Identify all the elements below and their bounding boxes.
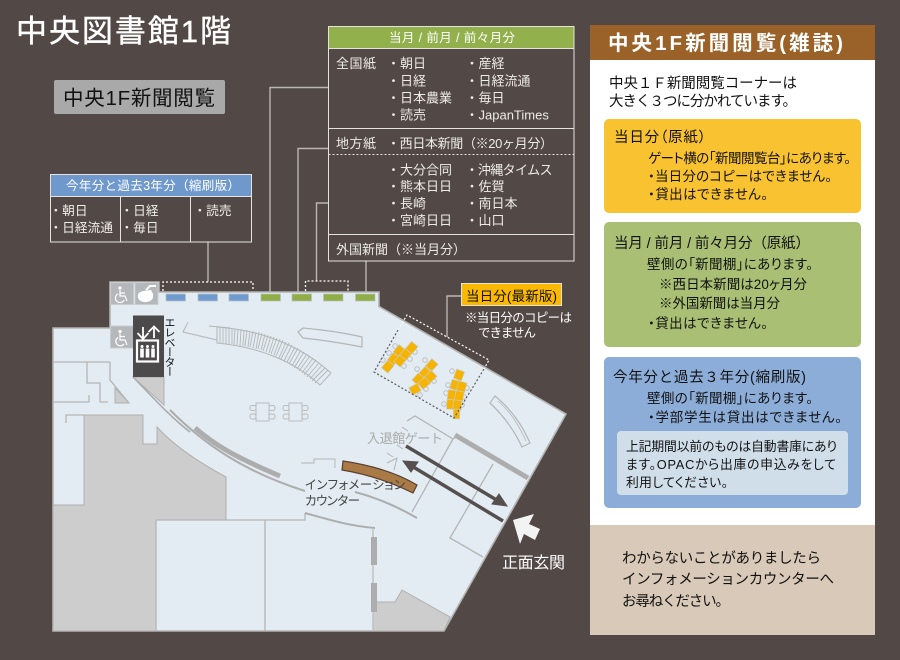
panel: 当月/前月/前々月分: 全国紙 [336,56,376,71]
dotted shelf brackets [163,281,348,291]
footer: help note: わからないことがありましたら [622,550,821,567]
newspaper reading tables: chairs [381,344,469,407]
intro text: 大きく３つに分かれています。 [609,93,797,110]
panel: 当月/前月/前々月分: 外国新聞（※当月分） [336,242,466,257]
leader lines [208,88,461,337]
note: 自動書庫 [617,431,848,495]
panel: 当月/前月/前々月分: ・大分合同 [387,162,452,178]
arrow: main entrance [513,514,540,544]
footer: help note: お尋ねください。 [622,593,730,610]
icon: elevator [133,316,164,377]
panel: 当月/前月/前々月分: 当月 / 前月 / 前々月分 [389,30,515,45]
panel: 当月/前月/前々月分: ・日本農業 [387,90,452,106]
callout: 当日分(最新版): 当日分(最新版) [466,289,557,304]
card: 当日分(原紙): ・当日分のコピーはできません。 [648,169,832,184]
panel: 当月/前月/前々月分: ・毎日 [466,90,505,106]
newspaper reading tables: yellow [381,341,467,419]
card: 当日分(原紙) [604,119,861,213]
label: 正面玄関: 正面玄関 [502,554,565,572]
panel: 今年分と過去3年分: ・読売 [194,203,232,218]
note: 自動書庫: 上記期間以前のものは自動書庫にあり [626,439,837,454]
panel: 今年分と過去3年分: ・毎日 [120,220,159,235]
info counter [342,461,417,493]
panel: 今年分と過去3年分: 今年分と過去3年分（縮刷版） [66,178,240,193]
panel: 今年分と過去3年分: ・日経 [120,204,159,218]
panel: 当月/前月/前々月分: ・宮崎日日 [387,213,452,228]
panel: 今年分と過去3年分: ・朝日 [50,204,88,218]
heading: 中央1F新聞閲覧(雑誌) [590,25,875,60]
panel: 当月/前月/前々月分: ・西日本新聞（※20ヶ月分） [387,136,553,151]
card: 今年分と過去3年分(縮刷版): 今年分と過去３年分(縮刷版) [613,369,806,386]
panel: 当月/前月/前々月分: ・日経流通 [466,74,531,88]
note: コピー不可: できません [478,326,536,340]
icon: wheelchair restroom left [110,282,134,304]
panel: 当月/前月/前々月分: ・日経 [387,74,426,88]
panel: 当月/前月/前々月分: ・産経 [466,56,505,71]
floor plan [53,281,566,631]
shelves: 縮刷版 blue [166,294,248,301]
panel: 当月/前月/前々月分: ・朝日 [387,56,426,71]
card: 当日分(原紙): ・貸出はできません。 [648,187,768,202]
panel: 当月/前月/前々月分: 地方紙 [336,136,376,151]
panel: 当月/前月/前々月分: ・沖縄タイムス [466,162,552,178]
panel: 今年分と過去3年分 [50,174,252,242]
label: インフォメーションカウンター: カウンター [305,494,360,508]
label: エレベーター: エレベーター [163,317,176,376]
panel: 当月/前月/前々月分: ・佐賀 [466,179,505,194]
panel: 当月/前月/前々月分: ・熊本日日 [387,179,452,194]
shelves: 原紙 green [261,294,375,301]
floor outline [53,282,566,631]
note: 自動書庫: ます。OPACから出庫の申込みをして [626,457,836,472]
note: コピー不可: ※当日分のコピーは [465,311,572,325]
label: インフォメーションカウンター: インフォメーション [305,478,405,492]
interior walls [53,362,493,631]
curved wall with counter [170,410,528,631]
panel: right information column [590,25,875,635]
panel: 当月/前月/前々月分: ・南日本 [466,196,518,211]
footer: help note [590,525,875,635]
footer: help note: インフォメーションカウンターへ [622,571,834,588]
card: 今年分と過去3年分(縮刷版): ・学部学生は貸出はできません。 [648,410,842,425]
section label: 中央1F新聞閲覧 [54,80,225,114]
dotted area: 当日分 tables [374,315,489,418]
card: 当月/前月/前々月分(原紙): ※外国新聞は当月分 [659,296,780,311]
card: 当日分(原紙): ゲート横の「新聞閲覧台」にあります。 [648,151,851,166]
card: 当月/前月/前々月分(原紙) [604,222,861,347]
card: 当日分(原紙): 当日分（原紙） [614,129,706,146]
card: 当月/前月/前々月分(原紙): 壁側の「新聞棚」にあります。 [647,257,813,272]
callout: 当日分(最新版) [462,284,562,306]
panel: 当月/前月/前々月分: ・長崎 [387,196,426,211]
icon: washing hands [135,282,158,304]
note: 自動書庫: 利用してください。 [626,475,728,490]
icon: wheelchair restroom lower [110,326,134,348]
label: インフォメーションカウンター [305,478,405,508]
panel: 当月/前月/前々月分 [328,26,574,261]
curved hatched stairs [183,322,530,447]
panel: 当月/前月/前々月分: ・山口 [466,213,505,228]
gray non-public areas [53,377,450,631]
intro text: 中央１Ｆ新聞閲覧コーナーは [609,75,797,92]
card: 今年分と過去3年分(縮刷版): 壁側の「新聞棚」にあります。 [647,391,813,406]
title: 中央図書館1階 [16,14,231,49]
card: 今年分と過去3年分(縮刷版) [604,357,861,508]
label: 入退館ゲート: 入退館ゲート [367,431,443,446]
heading: 中央1F新聞閲覧(雑誌): 中央1F新聞閲覧(雑誌) [608,32,843,55]
card: 当月/前月/前々月分(原紙): ※西日本新聞は20ヶ月分 [659,277,808,292]
arrows: gate flow [403,446,507,521]
card: 当月/前月/前々月分(原紙): 当月 / 前月 / 前々月分（原紙） [614,235,810,252]
note: コピー不可 [465,311,572,340]
panel: 今年分と過去3年分: ・日経流通 [50,221,113,235]
panel: 当月/前月/前々月分: ・読売 [387,108,426,122]
card: 当月/前月/前々月分(原紙): ・貸出はできません。 [648,316,768,331]
section label: 中央1F新聞閲覧: 中央1F新聞閲覧 [63,87,215,110]
intro text [609,75,797,110]
wall small marks [301,427,408,470]
tables with chairs [250,403,308,421]
panel: 当月/前月/前々月分: ・JapanTimes [466,108,549,122]
